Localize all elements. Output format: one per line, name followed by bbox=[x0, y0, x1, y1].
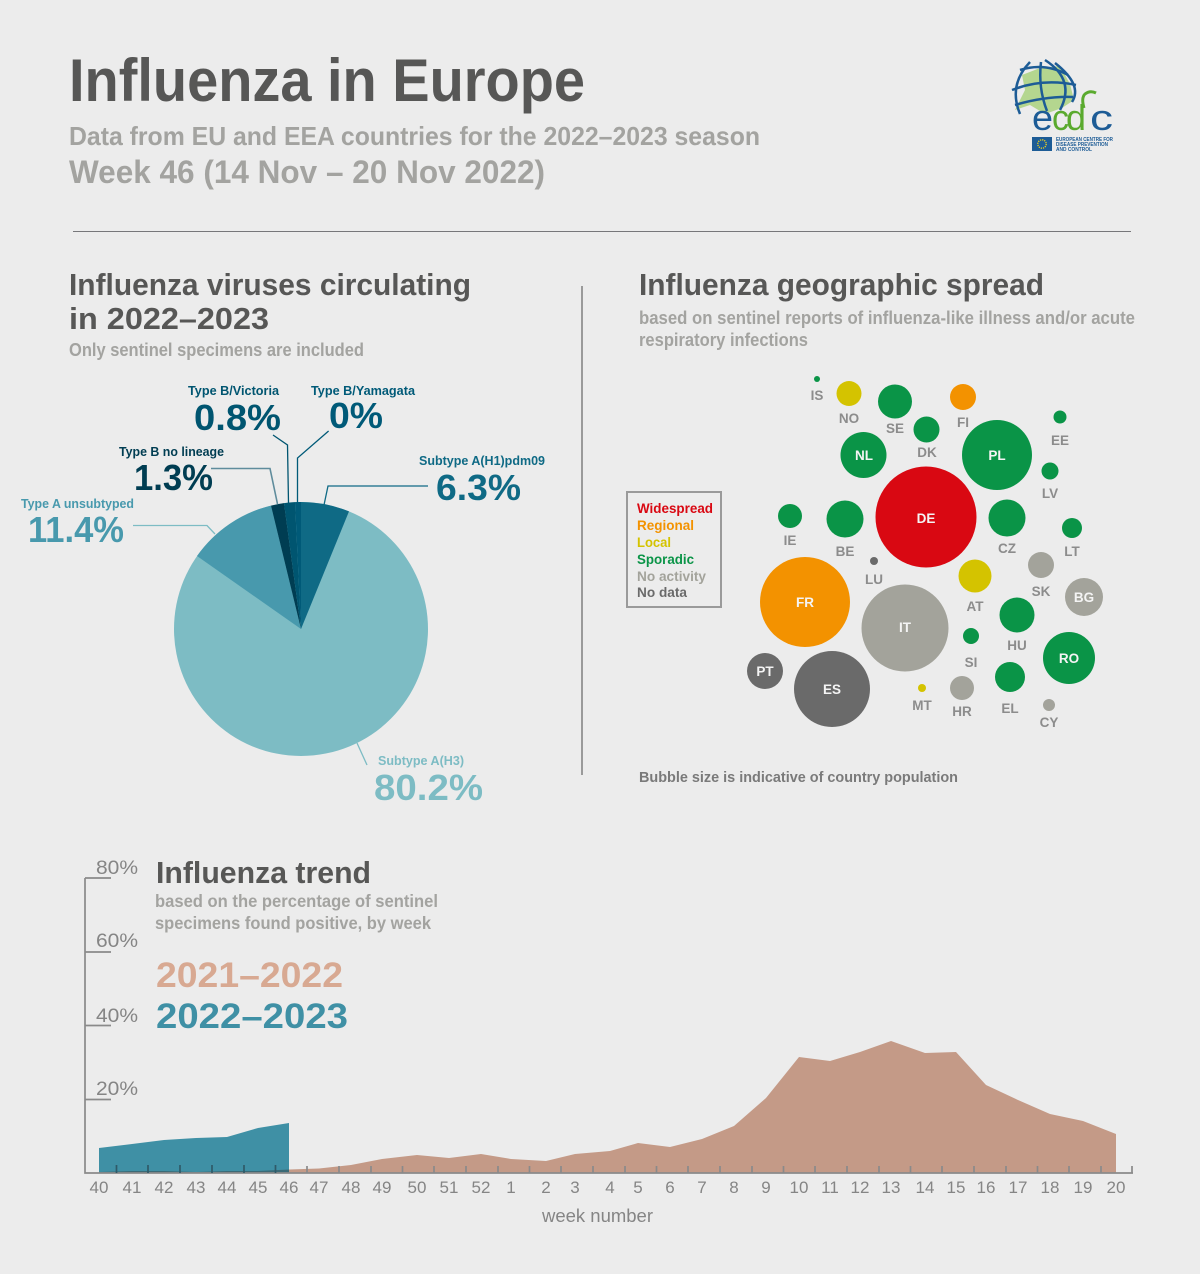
label: Type B/Yamagata: 0% bbox=[329, 395, 383, 436]
country labels inside bubbles: ES bbox=[823, 682, 841, 697]
legend: 2021-2022: 2021–2022 bbox=[156, 956, 343, 995]
x axis labels: 10 bbox=[790, 1178, 808, 1197]
x axis labels: 42 bbox=[155, 1178, 173, 1197]
area: 2021-2022 bbox=[99, 1041, 1116, 1173]
country labels outside bubbles: FI bbox=[957, 415, 969, 430]
country labels inside bubbles: IT bbox=[899, 620, 912, 635]
country labels inside bubbles: FR bbox=[796, 595, 814, 610]
legend: Sporadic bbox=[637, 551, 694, 567]
label: Type B/Yamagata bbox=[311, 383, 416, 436]
y axis labels: 60% bbox=[96, 931, 138, 952]
heading: trend: Influenza trend bbox=[156, 855, 371, 890]
x axis labels: 40 bbox=[90, 1178, 108, 1197]
panel: viruses circulating bbox=[21, 267, 545, 808]
x axis labels: 46 bbox=[280, 1178, 298, 1197]
label: Type B no lineage: Type B no lineage bbox=[119, 444, 224, 459]
legend bbox=[627, 492, 721, 607]
country labels outside bubbles: HU bbox=[1007, 638, 1027, 653]
country labels outside bubbles: IE bbox=[784, 533, 796, 548]
logo: ECDC: e bbox=[1032, 97, 1053, 138]
logo: ECDC: c bbox=[1052, 97, 1069, 138]
description: trend: specimens found positive, by week bbox=[155, 913, 431, 933]
x axis labels: 12 bbox=[851, 1178, 869, 1197]
connector lines bbox=[133, 431, 428, 765]
x axis labels: 45 bbox=[249, 1178, 267, 1197]
country labels outside bubbles: LT bbox=[1064, 544, 1080, 559]
x axis labels bbox=[90, 1178, 1125, 1197]
x axis labels: 44 bbox=[218, 1178, 236, 1197]
country labels outside bubbles: CZ bbox=[998, 541, 1016, 556]
country labels inside bubbles: NL bbox=[855, 448, 873, 463]
heading: viruses: in 2022–2023 bbox=[69, 301, 269, 336]
country labels outside bubbles: NO bbox=[839, 411, 859, 426]
country labels outside bubbles: SK bbox=[1032, 584, 1051, 599]
country labels outside bubbles: LV bbox=[1042, 486, 1058, 501]
country labels outside bubbles: LU bbox=[865, 572, 883, 587]
label: Subtype A(H3): 80.2% bbox=[374, 767, 483, 808]
logo: ECDC: d bbox=[1066, 97, 1086, 138]
legend: 2022-2023: 2022–2023 bbox=[156, 997, 348, 1036]
x axis labels: 51 bbox=[440, 1178, 458, 1197]
x axis labels: 16 bbox=[977, 1178, 995, 1197]
note: bubble size: Bubble size is indicative of country population bbox=[639, 769, 958, 786]
label: Type A unsubtyped bbox=[21, 496, 134, 550]
x axis labels: 13 bbox=[882, 1178, 900, 1197]
country labels inside bubbles: RO bbox=[1059, 651, 1079, 666]
x axis labels: 20 bbox=[1107, 1178, 1125, 1197]
description: trend bbox=[155, 891, 438, 933]
country labels outside bubbles: SE bbox=[886, 421, 904, 436]
country labels outside bubbles: SI bbox=[965, 655, 977, 670]
label: Type A unsubtyped: Type A unsubtyped bbox=[21, 496, 134, 511]
country labels outside bubbles bbox=[784, 388, 1080, 730]
x axis labels: 41 bbox=[123, 1178, 141, 1197]
country labels inside bubbles: BG bbox=[1074, 590, 1094, 605]
subtitle: week: Week 46 (14 Nov – 20 Nov 2022) bbox=[69, 154, 545, 190]
y axis labels: 80% bbox=[96, 858, 138, 879]
country labels outside bubbles: CY bbox=[1040, 715, 1058, 730]
country labels outside bubbles: MT bbox=[912, 698, 932, 713]
label: Type B/Yamagata: Type B/Yamagata bbox=[311, 383, 416, 398]
x axis labels: 2 bbox=[541, 1178, 551, 1197]
label: Type B/Victoria: Type B/Victoria bbox=[188, 383, 280, 398]
x axis labels: 49 bbox=[373, 1178, 391, 1197]
heading: viruses bbox=[69, 267, 471, 336]
y axis labels: 40% bbox=[96, 1006, 138, 1027]
country labels outside bubbles: DK bbox=[917, 445, 937, 460]
x axis labels: 6 bbox=[665, 1178, 675, 1197]
x axis labels: 17 bbox=[1009, 1178, 1027, 1197]
x axis labels: 11 bbox=[821, 1178, 839, 1197]
title: Influenza in Europe bbox=[69, 47, 585, 114]
y axis labels: 20% bbox=[96, 1079, 138, 1100]
logo: ECDC: DISEASE PREVENTION bbox=[1056, 142, 1108, 148]
x axis labels: 15 bbox=[947, 1178, 965, 1197]
country labels inside bubbles: PL bbox=[988, 448, 1006, 463]
x axis labels: 52 bbox=[472, 1178, 490, 1197]
legend: No data bbox=[637, 584, 687, 600]
axes and ticks bbox=[85, 878, 1133, 1173]
x axis labels: 3 bbox=[570, 1178, 580, 1197]
description: geographic spread bbox=[639, 308, 1135, 350]
country labels inside bubbles: PT bbox=[756, 664, 774, 679]
x axis title: week number bbox=[541, 1206, 653, 1226]
label: Subtype A(H3): Subtype A(H3) bbox=[378, 753, 464, 768]
logo: ECDC bbox=[1012, 60, 1113, 153]
country labels outside bubbles: BE bbox=[836, 544, 854, 559]
heading: viruses: Influenza viruses circulating bbox=[69, 267, 471, 302]
label: Subtype A(H1)pdm09: 6.3% bbox=[436, 467, 521, 508]
logo: ECDC: AND CONTROL bbox=[1056, 147, 1092, 153]
area: 2022-2023 bbox=[99, 1123, 289, 1173]
x axis labels: 50 bbox=[408, 1178, 426, 1197]
label: Type B no lineage bbox=[119, 444, 224, 498]
legend: Widespread bbox=[637, 500, 713, 516]
x axis labels: 14 bbox=[916, 1178, 934, 1197]
label: Type A unsubtyped: 11.4% bbox=[28, 509, 124, 550]
pie chart bbox=[174, 502, 428, 756]
x axis labels: 4 bbox=[605, 1178, 615, 1197]
label: Subtype A(H3) bbox=[374, 753, 483, 808]
country labels outside bubbles: HR bbox=[952, 704, 972, 719]
label: Type B/Victoria bbox=[188, 383, 281, 438]
note: sentinel specimens: Only sentinel specimens are included bbox=[69, 340, 364, 360]
heading: geographic spread: Influenza geographic spread bbox=[639, 267, 1044, 302]
label: Subtype A(H1)pdm09: Subtype A(H1)pdm09 bbox=[419, 453, 545, 468]
label: Type B/Victoria: 0.8% bbox=[194, 397, 281, 438]
x axis labels: 47 bbox=[310, 1178, 328, 1197]
label: Type B no lineage: 1.3% bbox=[134, 457, 213, 498]
x axis labels: 8 bbox=[729, 1178, 739, 1197]
x axis labels: 19 bbox=[1074, 1178, 1092, 1197]
description: trend: based on the percentage of sentinel bbox=[155, 891, 438, 911]
bubble chart bbox=[747, 376, 1103, 727]
x axis labels: 18 bbox=[1041, 1178, 1059, 1197]
description: geographic spread: respiratory infections bbox=[639, 330, 808, 350]
legend: Local bbox=[637, 534, 671, 550]
y axis labels bbox=[96, 858, 138, 1100]
logo: ECDC: c bbox=[1090, 97, 1113, 138]
country labels inside bubbles: DE bbox=[917, 511, 935, 526]
x axis labels: 9 bbox=[761, 1178, 771, 1197]
description: geographic spread: based on sentinel reports of influenza-like illness and/or acute bbox=[639, 308, 1135, 328]
country labels outside bubbles: EE bbox=[1051, 433, 1069, 448]
logo: ECDC: EUROPEAN CENTRE FOR bbox=[1056, 137, 1113, 143]
country labels inside bubbles bbox=[756, 448, 1094, 697]
x axis labels: 5 bbox=[633, 1178, 643, 1197]
x axis labels: 48 bbox=[342, 1178, 360, 1197]
legend: No activity bbox=[637, 568, 706, 584]
panel: geographic spread bbox=[627, 267, 1135, 786]
country labels outside bubbles: EL bbox=[1001, 701, 1019, 716]
label: Subtype A(H1)pdm09 bbox=[419, 453, 545, 508]
x axis labels: 7 bbox=[697, 1178, 707, 1197]
subtitle: data source: Data from EU and EEA countries for the 2022–2023 season bbox=[69, 121, 760, 151]
country labels outside bubbles: AT bbox=[966, 599, 984, 614]
country labels outside bubbles: IS bbox=[811, 388, 823, 403]
x axis labels: 43 bbox=[187, 1178, 205, 1197]
x axis labels: 1 bbox=[506, 1178, 516, 1197]
panel: influenza trend bbox=[85, 855, 1133, 1226]
legend: Regional bbox=[637, 517, 694, 533]
